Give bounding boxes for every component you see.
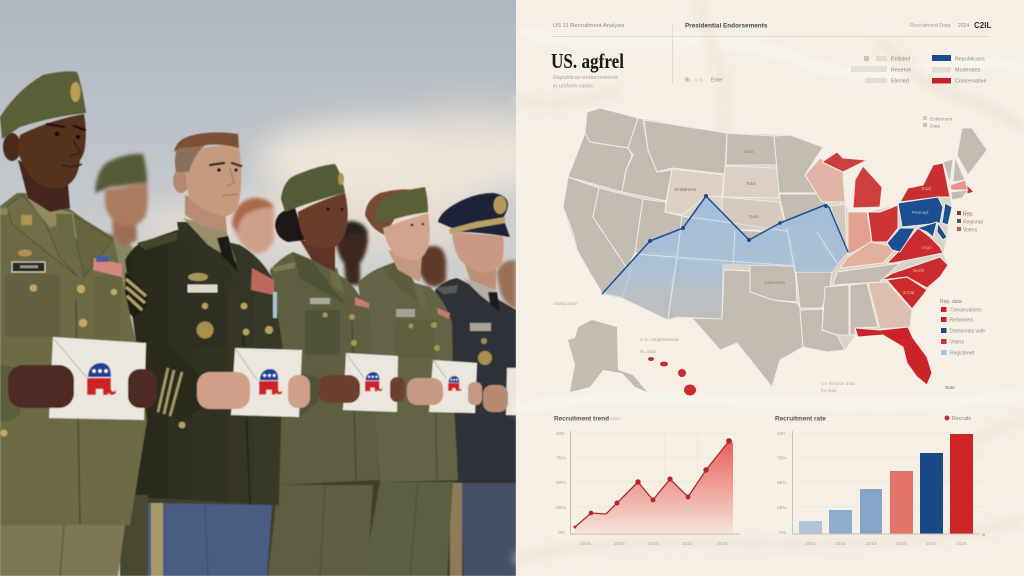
soldier 1: olive uniform xyxy=(0,71,147,576)
hands soldier 3 xyxy=(318,375,405,403)
y labels: 100 xyxy=(777,431,785,437)
map legend: south east: Democrats vote xyxy=(950,328,985,334)
pocket xyxy=(305,310,340,355)
tag xyxy=(396,309,415,317)
chevron patch xyxy=(125,272,147,318)
gridlines xyxy=(792,434,984,507)
Missouri xyxy=(787,228,837,272)
tie xyxy=(56,214,78,260)
trouser crease xyxy=(205,505,208,576)
map legend: mid atlantic: Regional xyxy=(963,220,983,226)
lapel xyxy=(7,195,78,277)
jacket xyxy=(125,230,283,505)
sleeve soldier 3 xyxy=(280,350,320,416)
ribbon strip xyxy=(273,292,277,318)
chart title: Recruitment trend xyxy=(554,416,609,422)
Vermont xyxy=(943,159,953,183)
Illinois xyxy=(817,207,848,263)
blue approval area on map xyxy=(600,190,855,325)
Idaho xyxy=(622,118,672,201)
trend points xyxy=(648,194,828,243)
back dark soldier 2 xyxy=(417,246,446,287)
x labels: 2014 xyxy=(805,541,816,547)
small note: Enter xyxy=(711,78,723,84)
soldier 2: dark green uniform xyxy=(125,132,283,576)
map state labels: Note xyxy=(945,385,955,390)
name tag xyxy=(12,262,45,272)
South Carolina xyxy=(887,277,927,309)
beret xyxy=(0,71,86,139)
ribbons xyxy=(251,268,274,295)
legend labels: Republicans xyxy=(955,56,985,62)
small note: U.S. xyxy=(695,78,704,82)
lapel right xyxy=(73,215,113,277)
subtitle: Republican endorsements xyxy=(553,75,618,81)
Virginia xyxy=(887,228,943,263)
x labels: 2022 xyxy=(682,541,693,547)
North Carolina xyxy=(881,257,948,288)
gray swatch 2 xyxy=(865,78,887,83)
x labels xyxy=(805,541,967,547)
head xyxy=(452,232,504,273)
cap badge xyxy=(338,173,344,185)
neck xyxy=(18,160,70,212)
Kentucky xyxy=(840,242,895,268)
legend labels: Elected xyxy=(891,78,909,84)
Wisconsin xyxy=(805,158,845,202)
header text row: Presidential Endorsements xyxy=(685,22,768,30)
soldier 5: navy officer xyxy=(435,193,516,576)
pocket button and badge xyxy=(196,303,214,338)
pocket xyxy=(434,330,435,357)
US map xyxy=(563,108,987,392)
Hawaii islands xyxy=(648,357,696,396)
trousers xyxy=(145,503,272,576)
hair top xyxy=(174,132,239,152)
crowd behind the front line xyxy=(0,71,516,576)
New Hampshire xyxy=(953,157,965,182)
x labels: 2018 xyxy=(614,541,625,547)
bar chart: Recruits xyxy=(952,416,971,422)
face xyxy=(383,213,430,260)
cap xyxy=(281,164,345,212)
face xyxy=(186,143,241,216)
New York xyxy=(900,163,950,202)
paper wrinkles xyxy=(516,0,1024,560)
trousers xyxy=(0,525,125,576)
shirt collar xyxy=(27,198,77,240)
small note xyxy=(685,78,723,84)
tag xyxy=(470,323,491,331)
New Mexico xyxy=(668,259,723,320)
x labels: 2016 xyxy=(835,541,846,547)
Ohio xyxy=(868,205,898,242)
chart title: Recruitment rate xyxy=(775,416,826,422)
small note: Br. xyxy=(685,78,691,84)
jacket xyxy=(270,252,379,485)
map legend: south east xyxy=(940,299,985,356)
legend labels: Conservative xyxy=(955,78,986,84)
North Dakota xyxy=(726,133,777,165)
trouser crease xyxy=(60,525,64,576)
y labels: 50% xyxy=(777,480,787,486)
Nevada xyxy=(593,188,643,268)
clouds xyxy=(130,107,555,255)
header text row: C2IL xyxy=(974,21,991,30)
cap xyxy=(375,187,428,222)
x labels: 2022 xyxy=(926,541,937,547)
badge xyxy=(478,351,492,365)
header divider xyxy=(672,24,673,84)
map state labels: Data xyxy=(749,214,759,219)
header rule xyxy=(552,36,988,37)
Michigan lower xyxy=(853,166,882,208)
legend labels: Moderates xyxy=(955,68,981,74)
title: US. agfrel xyxy=(551,49,624,73)
map legend: mid atlantic: Rep. xyxy=(963,212,974,218)
axis end mark: a xyxy=(982,532,985,538)
hands soldier 5 xyxy=(483,385,508,412)
header text row: US 11 Recruitment Analysis xyxy=(553,23,625,29)
hands soldier 1 xyxy=(8,365,157,408)
buttons xyxy=(481,338,487,344)
collar lapel xyxy=(177,222,240,290)
South Dakota xyxy=(723,166,779,198)
chest pocket xyxy=(181,297,227,349)
medal xyxy=(18,250,32,256)
y labels xyxy=(777,431,787,536)
Massachusetts xyxy=(950,180,968,190)
legend top xyxy=(851,55,986,84)
shirt collar xyxy=(183,218,236,262)
pale swatch xyxy=(932,67,951,72)
Alabama xyxy=(850,283,878,335)
map state labels: Oklahoma xyxy=(764,280,785,285)
back ginger soldier xyxy=(232,198,274,254)
map legend: mid atlantic xyxy=(957,211,983,234)
trouser gold stripe xyxy=(151,503,163,576)
map state labels: for data xyxy=(821,388,837,393)
hair xyxy=(365,189,412,235)
sleeve xyxy=(0,365,22,421)
Maryland xyxy=(917,222,937,237)
envelope 3 xyxy=(343,353,398,412)
map state labels: Virgin xyxy=(921,245,933,250)
Tennessee xyxy=(833,263,900,285)
y labels xyxy=(556,431,566,536)
New Jersey xyxy=(942,203,952,225)
shoulder strap xyxy=(270,262,295,272)
map state labels xyxy=(553,149,955,393)
y labels: 25% xyxy=(777,505,787,511)
map legend: south east: Rep. data xyxy=(940,299,962,305)
gold side panel xyxy=(450,483,462,576)
wing badge xyxy=(188,273,208,281)
peaked cap xyxy=(438,193,510,237)
panel: soldiers photo illustration xyxy=(0,0,555,576)
map silhouette base xyxy=(563,112,952,387)
Iowa xyxy=(779,194,828,230)
back dark soldier xyxy=(335,221,368,285)
Florida xyxy=(855,327,932,385)
map legend: mid atlantic: Voters xyxy=(963,228,978,234)
y labels: 75% xyxy=(777,456,787,462)
x labels xyxy=(580,541,728,547)
map state labels: Total xyxy=(921,186,931,191)
map legend: south east: Registered xyxy=(950,350,974,356)
face details xyxy=(47,124,85,130)
y labels: 0% xyxy=(779,530,787,536)
axes xyxy=(570,431,740,534)
name tag text strip xyxy=(20,266,38,268)
x labels: 2018 xyxy=(866,541,877,547)
buttons xyxy=(408,322,440,351)
map state labels: US election data xyxy=(821,381,855,386)
right pocket xyxy=(94,276,121,337)
map legend: south east: Voters xyxy=(950,340,965,346)
map legend: north east: Data xyxy=(930,124,940,130)
axes xyxy=(792,431,980,534)
shoulder strap xyxy=(436,285,458,294)
Minnesota xyxy=(774,135,823,193)
chart legend xyxy=(944,416,950,420)
header text row xyxy=(553,21,991,30)
Louisiana xyxy=(800,309,845,352)
Georgia xyxy=(868,282,912,329)
background soldiers xyxy=(95,154,516,310)
y labels: 25% xyxy=(556,505,566,511)
Kansas xyxy=(733,230,793,265)
soldier behind legs gap xyxy=(120,420,148,576)
gray swatch 1 xyxy=(851,66,887,72)
ribbons xyxy=(93,258,122,277)
tie xyxy=(329,268,345,295)
collar pin xyxy=(21,215,32,225)
map legend: south east: Conservatives xyxy=(950,308,982,314)
legend labels: Enlisted xyxy=(891,56,910,62)
trouser crease xyxy=(410,482,418,576)
tag xyxy=(310,298,330,304)
hair side xyxy=(175,142,205,172)
Oklahoma xyxy=(724,265,797,302)
Illinois east strip xyxy=(830,204,847,252)
beret badge xyxy=(70,82,80,102)
Wyoming xyxy=(665,169,724,215)
eyes xyxy=(217,168,238,172)
x labels: 2016 xyxy=(580,541,591,547)
sleeve stripes xyxy=(158,368,182,416)
Michigan upper xyxy=(822,152,867,172)
Pennsylvania xyxy=(898,197,943,227)
subtitle: in uniform ranks xyxy=(553,84,593,90)
Alaska xyxy=(568,320,647,392)
bars xyxy=(799,521,822,534)
back soldier with beret xyxy=(95,154,148,310)
legend labels: Reserve xyxy=(891,68,911,74)
envelope 5 at right edge xyxy=(506,368,516,415)
hair bun xyxy=(275,208,305,242)
Connecticut xyxy=(951,190,968,200)
Rhode Island xyxy=(967,185,974,194)
y labels: 100 xyxy=(556,431,564,437)
chevrons xyxy=(126,279,146,310)
Oregon xyxy=(568,133,632,192)
collar xyxy=(464,278,496,304)
Washington xyxy=(585,108,638,148)
envelope 1 xyxy=(49,337,146,420)
neck xyxy=(185,195,227,232)
map state labels: Pennsyl xyxy=(912,210,928,215)
left swatches xyxy=(864,56,869,61)
center seam xyxy=(434,330,437,480)
trousers xyxy=(268,485,373,576)
state borders inside blue area xyxy=(635,216,837,320)
cap band xyxy=(449,217,505,234)
bar chart xyxy=(775,416,985,547)
Utah xyxy=(635,199,682,253)
y labels: 50% xyxy=(556,480,566,486)
tie xyxy=(488,292,500,312)
tan swatch xyxy=(876,56,887,61)
x labels: 2020 xyxy=(896,541,907,547)
hands soldier 2 xyxy=(197,372,310,409)
red swatch xyxy=(932,78,951,84)
subtitle xyxy=(553,75,618,90)
trouser crease xyxy=(320,485,325,576)
legend labels xyxy=(891,56,986,84)
line chart xyxy=(554,416,740,547)
line chart: 2024 xyxy=(610,416,621,421)
hands soldier 4 xyxy=(407,378,482,405)
trouser xyxy=(460,483,516,576)
map legend: south east: Reformers xyxy=(950,318,974,324)
eyes xyxy=(411,223,424,226)
trousers xyxy=(363,482,453,576)
soldier 4: olive uniform xyxy=(358,187,458,576)
map state labels: S.Car xyxy=(903,290,915,295)
face xyxy=(18,114,86,189)
ribbon xyxy=(355,297,369,308)
ear xyxy=(3,133,21,161)
blue swatch xyxy=(932,55,951,61)
envelope 4 xyxy=(429,360,477,413)
map state labels: Hi. data xyxy=(640,349,656,354)
California xyxy=(563,177,629,297)
ear xyxy=(173,169,189,193)
jacket xyxy=(435,278,516,483)
x labels: 2020 xyxy=(648,541,659,547)
Arkansas xyxy=(796,272,832,308)
neck xyxy=(388,250,422,282)
paper background xyxy=(516,0,1024,576)
points xyxy=(574,438,732,528)
blue trend line xyxy=(602,194,848,294)
face xyxy=(298,193,348,248)
buttons xyxy=(0,284,117,436)
neck xyxy=(464,264,496,290)
nose and mouth xyxy=(222,168,238,196)
nose and mouth xyxy=(62,140,82,167)
map state labels: North xyxy=(913,268,925,273)
tie xyxy=(414,285,427,310)
center seam xyxy=(76,300,80,524)
face details xyxy=(210,163,241,166)
left pocket xyxy=(5,274,60,337)
center seam xyxy=(352,320,356,482)
ribbon xyxy=(437,308,450,319)
Mississippi xyxy=(822,285,849,335)
name tag xyxy=(187,284,218,293)
center seam xyxy=(243,330,250,505)
lapel xyxy=(293,252,347,305)
envelope 2 xyxy=(231,348,302,417)
map state labels: Enlistment xyxy=(675,187,697,192)
Delaware xyxy=(937,223,947,240)
Texas xyxy=(692,270,803,387)
jacket xyxy=(358,267,458,482)
map state labels: Total xyxy=(746,181,756,186)
dark lower crowd xyxy=(147,452,465,576)
back dark soldier 3 xyxy=(497,260,516,310)
Maine xyxy=(957,128,987,175)
header text row: 2024 xyxy=(958,23,969,29)
jacket xyxy=(0,193,147,525)
x labels: 2024 xyxy=(717,541,728,547)
map legend: north east: Enlistment xyxy=(930,116,953,122)
buttons xyxy=(322,312,357,346)
y labels: 75% xyxy=(556,456,566,462)
Nebraska xyxy=(722,197,787,230)
sleeve xyxy=(135,300,205,420)
map state labels: Data xyxy=(744,149,754,154)
x labels: 2024 xyxy=(956,541,967,547)
eyes xyxy=(55,132,80,139)
gridlines xyxy=(570,431,740,534)
Arizona xyxy=(622,254,675,320)
shoulder mark xyxy=(0,208,8,215)
cap badge xyxy=(494,196,506,214)
neck xyxy=(300,240,335,272)
sky background xyxy=(0,0,516,576)
Colorado xyxy=(677,216,735,264)
map legend: north east xyxy=(923,116,953,130)
buttons xyxy=(179,303,273,428)
map state labels: Alaska note xyxy=(553,301,577,306)
soldier 3: woman in olive xyxy=(268,164,379,576)
area xyxy=(575,441,733,533)
y labels: 0% xyxy=(558,530,566,536)
line xyxy=(575,441,729,527)
flag ribbon xyxy=(96,256,109,262)
West Virginia xyxy=(887,228,915,252)
tie xyxy=(217,236,238,272)
map state labels: U.S. congressional xyxy=(640,337,679,342)
Indiana xyxy=(848,212,872,255)
lapel xyxy=(382,262,415,284)
eyes xyxy=(326,207,343,211)
shoulder strap xyxy=(137,232,177,250)
Montana xyxy=(644,120,727,174)
header text row: Recruitment Data xyxy=(910,23,950,29)
panel: map and data sheet xyxy=(516,0,1024,576)
